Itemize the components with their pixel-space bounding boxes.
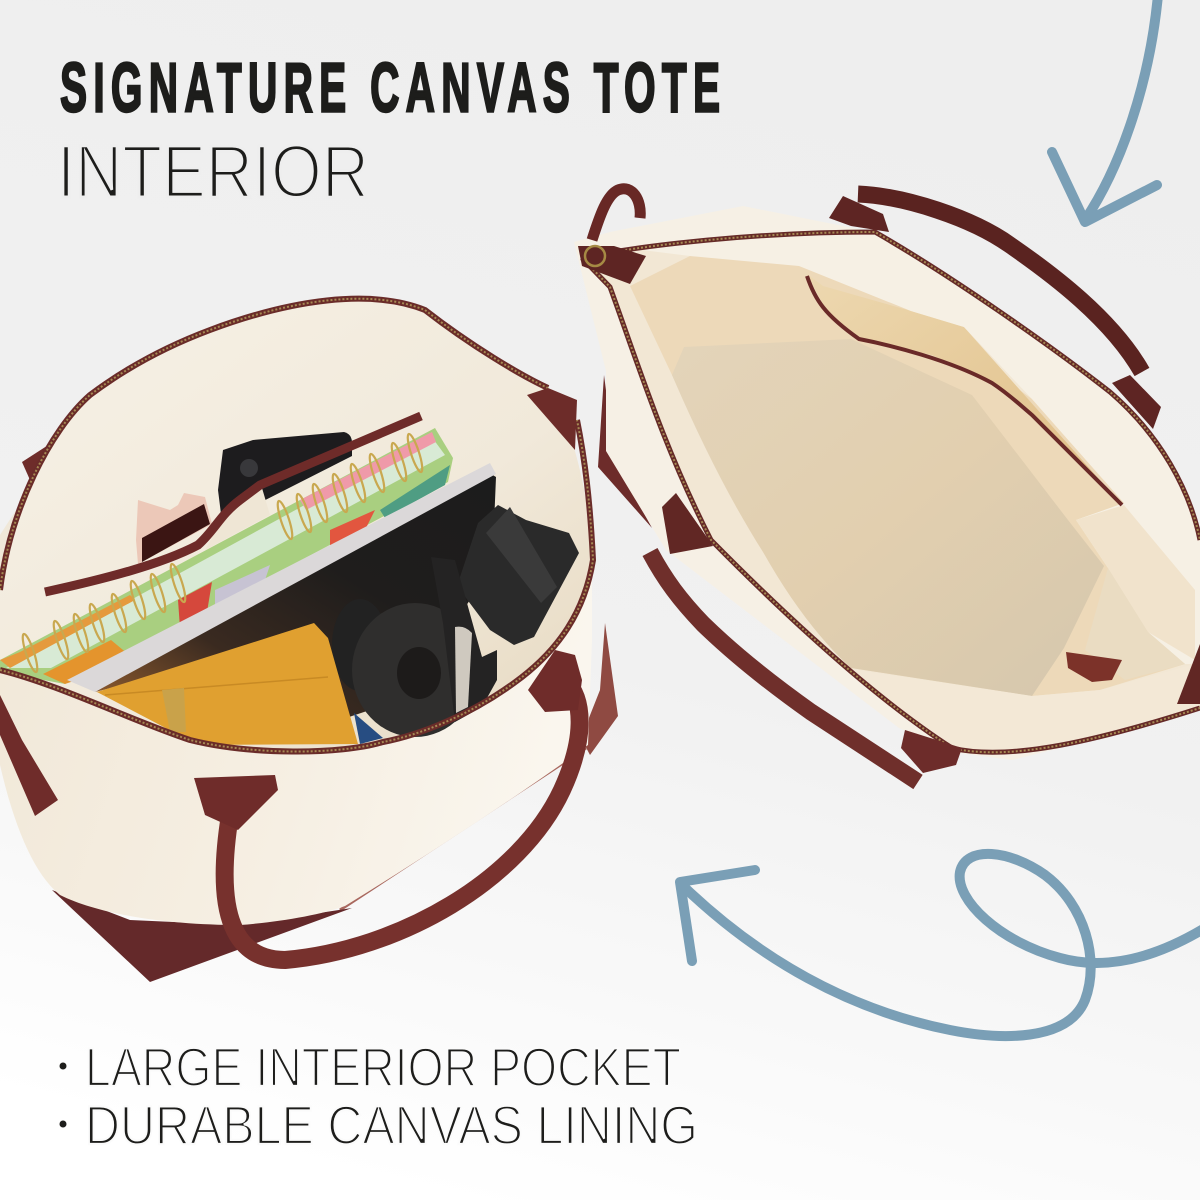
bottom strap tab right xyxy=(901,730,962,773)
arrow: top right pointing to open bag xyxy=(1052,0,1158,222)
bullet 2 xyxy=(60,1120,66,1128)
right end leather xyxy=(1177,644,1200,704)
leather base xyxy=(52,890,352,982)
right inner wall xyxy=(1076,505,1195,660)
yellow pouch xyxy=(97,623,358,745)
headphones xyxy=(332,557,497,737)
spiral rings xyxy=(20,433,425,673)
floor of lining xyxy=(672,339,1104,696)
front handle right tab xyxy=(528,650,582,712)
top left tab with clasp xyxy=(578,246,646,284)
front handle xyxy=(225,680,580,960)
cream flap above pocket xyxy=(642,232,1200,664)
top left handle xyxy=(592,189,640,240)
rear strap xyxy=(340,623,618,910)
notebook xyxy=(0,428,453,684)
blue item xyxy=(354,713,383,744)
outer back canvas sliver xyxy=(0,465,45,600)
laptop xyxy=(67,463,496,720)
back wall beige xyxy=(630,256,1185,696)
top handle tab left xyxy=(829,196,889,232)
water bottle xyxy=(460,505,579,645)
feature: large interior pocket: LARGE INTERIOR POCKET xyxy=(85,1036,681,1098)
zipper: back rim xyxy=(0,299,548,590)
left side strap xyxy=(0,695,58,816)
right bag: empty open tote xyxy=(574,189,1200,782)
top handle tab right xyxy=(1112,375,1161,429)
zipper: upper rim xyxy=(582,232,1200,540)
bottom strap xyxy=(650,552,918,782)
title: SIGNATURE CANVAS TOTE xyxy=(60,49,720,127)
pocket edge xyxy=(45,416,421,592)
bullet 1 xyxy=(60,1062,66,1070)
front fold of lining xyxy=(843,664,1195,751)
feature list xyxy=(60,1036,698,1156)
back handle stub xyxy=(22,442,53,480)
inner loop xyxy=(1066,652,1122,682)
interior lining xyxy=(582,232,1200,752)
subtitle: INTERIOR xyxy=(57,130,369,213)
left bag: packed tote xyxy=(0,299,618,982)
lower left leather base xyxy=(598,375,652,528)
canvas body xyxy=(0,565,592,925)
interior pocket xyxy=(807,274,1122,505)
right zipper tab xyxy=(527,388,577,450)
zipper: front rim xyxy=(0,420,593,752)
top right handle xyxy=(858,194,1142,372)
front handle left tab xyxy=(194,775,278,830)
arrow: curly loop pointing to filled bag xyxy=(680,854,1200,1036)
pocket edge xyxy=(807,276,1122,505)
bottom strap tab left xyxy=(662,493,713,554)
outer canvas xyxy=(574,206,1200,760)
phone wallet xyxy=(136,493,212,564)
interior lining xyxy=(0,299,593,752)
feature: durable canvas lining: DURABLE CANVAS LINING xyxy=(85,1094,698,1156)
phone xyxy=(218,432,352,522)
pocket cloth xyxy=(205,488,270,550)
zipper: lower rim xyxy=(582,258,1200,752)
